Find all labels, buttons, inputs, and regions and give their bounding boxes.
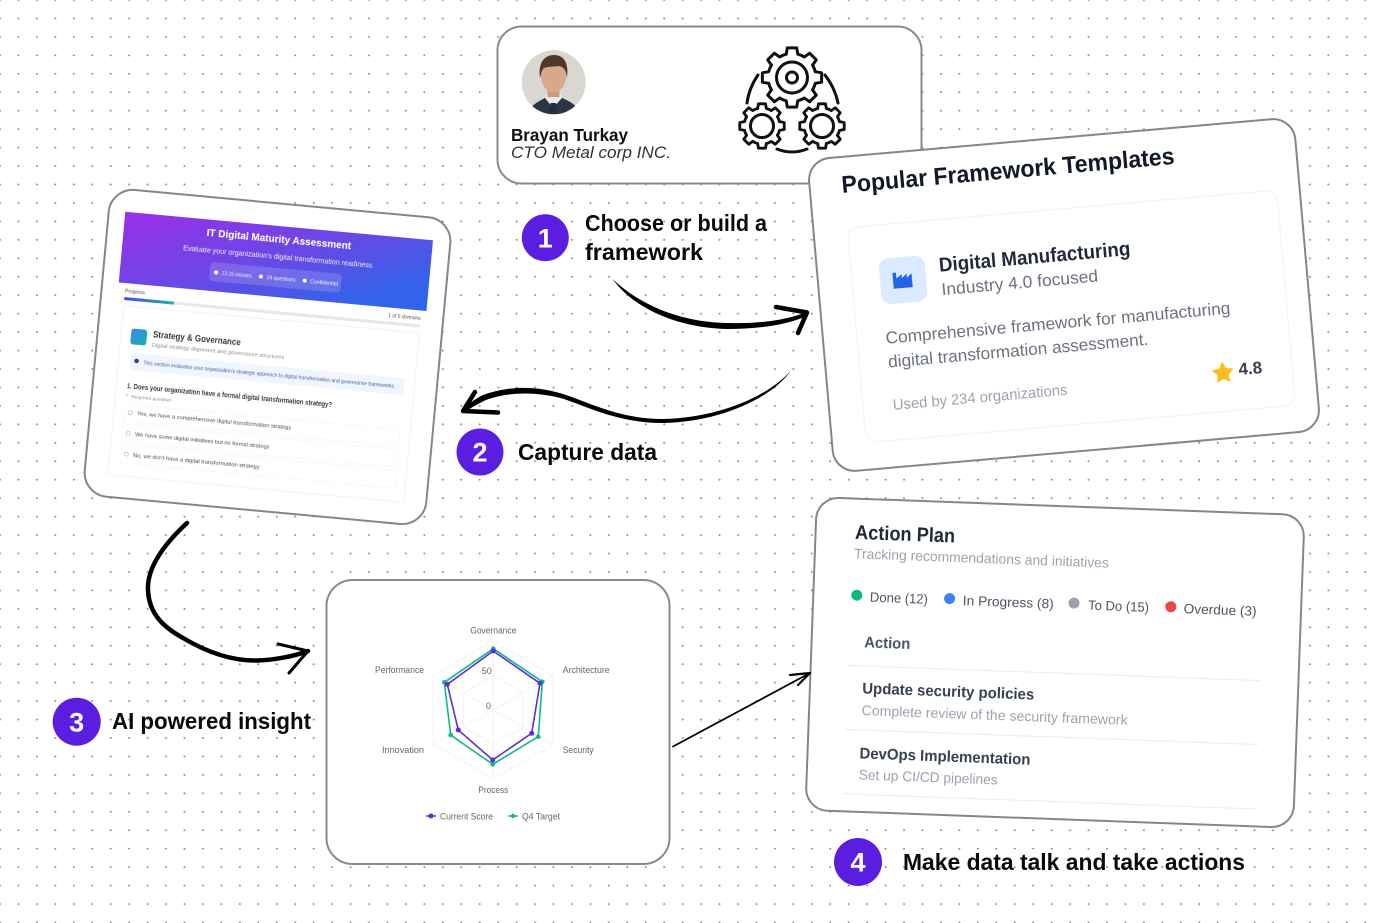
step 2 label: Capture data xyxy=(518,439,657,465)
arrow: templates to form xyxy=(463,370,791,423)
table header: Action xyxy=(864,634,911,653)
status legend: Overdue (3) xyxy=(1183,601,1257,619)
question section xyxy=(108,305,419,502)
action row: security policies: Update security policies xyxy=(862,680,1035,704)
step 1 badge: 1 xyxy=(538,224,553,254)
progress bar: 1 of 6 domains xyxy=(388,313,421,322)
radar legend: Current Score xyxy=(440,812,493,822)
action row: security policies: Complete review of the security framework xyxy=(861,702,1129,728)
arrow: form to radar xyxy=(148,523,308,673)
step 4 label: Make data talk and take actions xyxy=(903,849,1245,875)
radar axis labels xyxy=(375,626,610,795)
rating: 4.8 xyxy=(1238,358,1263,379)
radar axis labels: Performance xyxy=(375,665,424,675)
step 4 badge xyxy=(834,838,882,886)
status legend xyxy=(851,589,1257,619)
panel: assessment form xyxy=(83,188,452,526)
template title: Digital Manufacturing xyxy=(938,238,1131,277)
step 4 badge: 4 xyxy=(850,848,866,878)
panel: profile and framework icon xyxy=(498,26,922,184)
radar axis values: 50 xyxy=(482,666,492,676)
info note: This section evaluates your organization's strategic approach to digital transformation and governance frameworks. xyxy=(143,361,396,390)
radar axis values xyxy=(482,666,492,711)
answer options: Yes, we have a comprehensive digital transformation strategy xyxy=(137,411,292,432)
answer options: We have some digital initiatives but no formal strategy xyxy=(135,432,270,451)
action row: devops: DevOps Implementation xyxy=(859,745,1031,769)
progress bar xyxy=(124,289,421,327)
question text: 1. Does your organization have a formal digital transformation strategy? xyxy=(127,383,332,409)
section title: Strategy & Governance xyxy=(153,329,241,347)
icon: star xyxy=(1213,362,1233,382)
action row: devops xyxy=(858,745,1031,789)
step 1 label: framework xyxy=(585,239,703,265)
required note: * xyxy=(125,394,128,400)
panel: popular framework templates xyxy=(807,117,1321,473)
required note xyxy=(125,394,172,404)
radar axis labels: Innovation xyxy=(382,745,424,755)
step 3 label: AI powered insight xyxy=(112,708,311,734)
meta pill xyxy=(209,262,342,293)
answer options xyxy=(120,404,400,488)
radar legend: Q4 Target xyxy=(522,812,560,822)
step 3 badge xyxy=(53,698,101,746)
step 2 badge xyxy=(456,428,504,476)
series: q4 target xyxy=(442,646,545,767)
step 1 badge xyxy=(522,214,569,261)
series: current score xyxy=(445,648,542,762)
step 3 badge: 3 xyxy=(69,708,84,738)
action row: devops: Set up CI/CD pipelines xyxy=(858,766,998,787)
role: CTO Metal corp INC. xyxy=(511,143,671,162)
radar legend xyxy=(426,812,560,822)
radar axis labels: Security xyxy=(563,745,594,755)
panel: radar chart xyxy=(326,580,670,864)
radar axis labels: Architecture xyxy=(563,665,610,675)
form header banner xyxy=(119,212,433,311)
subheading: Tracking recommendations and initiatives xyxy=(854,545,1109,571)
status legend: To Do (15) xyxy=(1088,598,1149,615)
status legend: In Progress (8) xyxy=(963,593,1054,611)
icon: section chart xyxy=(130,328,147,346)
name: Brayan Turkay xyxy=(511,125,628,145)
meta pill: Confidential xyxy=(310,279,338,288)
template subtitle: Industry 4.0 focused xyxy=(941,267,1099,299)
template card xyxy=(847,190,1295,443)
arrow: radar to action plan xyxy=(673,673,810,746)
step 1 label: Choose or build a xyxy=(585,210,767,236)
icon: factory xyxy=(878,255,928,305)
arrow: step 1 to templates xyxy=(612,279,808,333)
template description: Comprehensive framework for manufacturing xyxy=(885,299,1231,348)
info note xyxy=(130,353,405,395)
radar axis values: 0 xyxy=(486,701,491,711)
meta pill: 24 questions xyxy=(266,275,296,284)
step 2 badge: 2 xyxy=(472,438,488,468)
step 1 label xyxy=(585,210,767,265)
progress bar: Progress xyxy=(125,289,146,296)
template description: digital transformation assessment. xyxy=(887,330,1149,372)
icon: portrait photo xyxy=(520,50,588,116)
section subtitle: Digital strategy alignment and governance structures xyxy=(151,343,285,361)
panel: action plan xyxy=(805,497,1305,828)
form subtitle: Evaluate your organization's digital transformation readiness xyxy=(183,245,373,270)
icon: three gears xyxy=(740,48,844,152)
heading: popular framework templates: Popular Framework Templates xyxy=(840,143,1176,199)
meta pill: 12-15 minutes xyxy=(222,271,252,280)
radar axis labels: Governance xyxy=(470,626,516,636)
radar grid xyxy=(434,641,553,779)
required note: Required question xyxy=(131,394,172,403)
status legend: Done (12) xyxy=(870,590,928,607)
form title: IT Digital Maturity Assessment xyxy=(206,227,352,252)
template description xyxy=(885,299,1233,372)
radar axis labels: Process xyxy=(478,785,509,795)
answer options: No, we don't have a digital transformation strategy xyxy=(133,453,260,471)
heading: action plan: Action Plan xyxy=(855,522,955,548)
action row: security policies xyxy=(861,680,1130,728)
usage count: Used by 234 organizations xyxy=(892,382,1068,414)
